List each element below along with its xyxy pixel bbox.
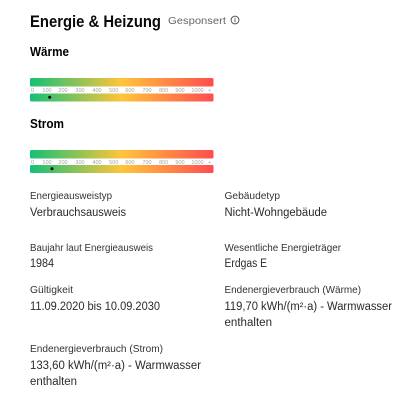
field: Baujahr: 1984 <box>30 258 55 270</box>
field: Baujahr <box>30 243 153 270</box>
field: Gebäudetyp <box>224 191 327 219</box>
field: Gebäudetyp: Gebäudetyp <box>224 191 280 202</box>
field: Endenergieverbrauch Strom <box>30 344 201 388</box>
scale: Strom: 600 <box>125 160 135 166</box>
scale: Strom: 500 <box>109 160 118 166</box>
field: Baujahr: Baujahr laut Energieausweis <box>30 243 153 254</box>
field: Gültigkeit <box>30 285 160 313</box>
field: Energieausweistyp <box>30 191 126 219</box>
field: Endenergieverbrauch Wärme: enthalten <box>224 317 272 329</box>
scale: Wärme: 900 <box>175 88 185 94</box>
marker: Wärme value <box>48 96 51 99</box>
sponsored label: Gesponsert <box>168 15 226 27</box>
scale: Wärme: 500 <box>109 88 118 94</box>
scale: Strom: 700 <box>142 160 152 166</box>
scale: Strom: 0 <box>31 160 34 166</box>
field: Gebäudetyp: Nicht-Wohngebäude <box>224 207 327 219</box>
scale: Strom: 800 <box>159 160 168 166</box>
scale: Wärme: 400 <box>92 88 102 94</box>
field: Endenergieverbrauch Wärme: 119,70 kWh/(m²·a) - Warmwasser <box>224 301 392 313</box>
field: Energieausweistyp: Verbrauchsausweis <box>30 207 126 219</box>
scale: Wärme: 700 <box>142 88 152 94</box>
field: Endenergieverbrauch Wärme <box>224 285 392 329</box>
field: Endenergieverbrauch Strom: Endenergieverbrauch (Strom) <box>30 344 163 355</box>
scale: Wärme: 1000 <box>191 88 204 94</box>
field: Endenergieverbrauch Strom: 133,60 kWh/(m²·a) - Warmwasser <box>30 360 201 372</box>
field: Endenergieverbrauch Wärme: Endenergieverbrauch (Wärme) <box>224 285 361 296</box>
scale: Strom <box>30 150 214 173</box>
field: Gültigkeit: Gültigkeit <box>30 285 73 296</box>
scale: Strom: + <box>208 160 211 166</box>
scale: Wärme: 600 <box>125 88 135 94</box>
marker: Strom value <box>50 167 54 170</box>
field: Endenergieverbrauch Strom: enthalten <box>30 376 77 388</box>
heading: Wärme: Wärme <box>30 45 69 59</box>
scale: Strom: 400 <box>92 160 102 166</box>
title: Energie & Heizung <box>30 13 161 31</box>
scale: Wärme <box>30 78 214 102</box>
field: Energieausweistyp: Energieausweistyp <box>30 191 112 202</box>
icon: info <box>231 16 239 24</box>
scale: Strom: 200 <box>58 160 68 166</box>
scale: Strom: 100 <box>42 160 52 166</box>
scale: Strom: 900 <box>175 160 185 166</box>
field: Gültigkeit: 11.09.2020 bis 10.09.2030 <box>30 301 160 313</box>
field: Energieträger: Erdgas E <box>224 258 267 270</box>
scale: Wärme: 200 <box>58 88 68 94</box>
scale: Wärme: + <box>208 88 211 94</box>
field: Energieträger: Wesentliche Energieträger <box>224 243 342 254</box>
scale: Wärme: 300 <box>75 88 85 94</box>
scale: Wärme: 0 <box>31 88 34 94</box>
scale: Wärme: 100 <box>42 88 52 94</box>
scale: Strom: 300 <box>75 160 85 166</box>
heading: Strom: Strom <box>30 117 64 131</box>
field: Energieträger <box>224 243 342 270</box>
scale: Strom: 1000 <box>191 160 204 166</box>
scale: Wärme: 800 <box>159 88 168 94</box>
